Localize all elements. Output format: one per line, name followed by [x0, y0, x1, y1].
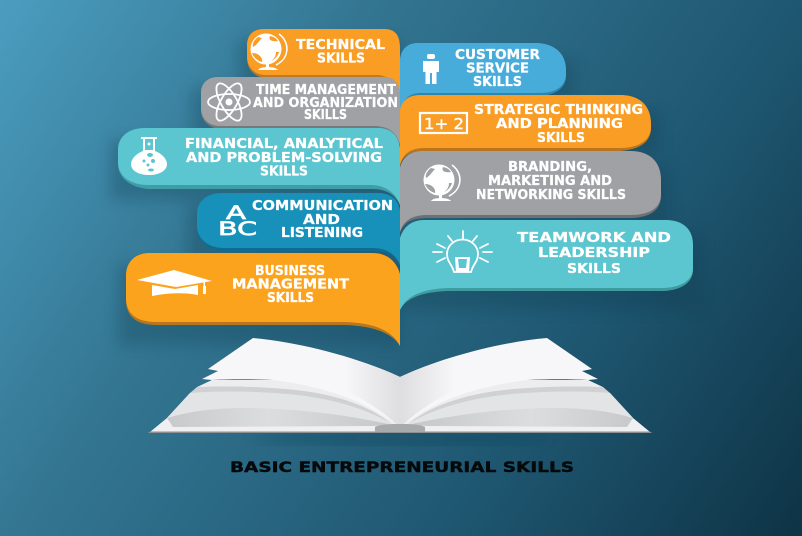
label: technical skills: SKILLS — [317, 52, 365, 66]
label: teamwork and leadership skills: TEAMWORK AND — [517, 231, 671, 246]
book base edge — [148, 432, 652, 433]
open book — [148, 338, 652, 443]
icon: ABC letters: A — [226, 202, 246, 224]
label: communication and listening — [252, 199, 393, 241]
bubble: business management skills — [126, 253, 400, 346]
label: financial, analytical and problem-solving skills: SKILLS — [260, 164, 308, 180]
icon: globe — [250, 34, 287, 70]
bubble: branding, marketing and networking skills — [400, 151, 661, 232]
soft shadows behind speech bubbles — [110, 40, 702, 345]
label: branding, marketing and networking skills: NETWORKING SKILLS — [476, 188, 626, 203]
left pages — [150, 338, 400, 432]
label: time management and organization skills: SKILLS — [304, 108, 347, 123]
label: business management skills: BUSINESS — [255, 264, 325, 279]
icon: flask — [131, 137, 167, 175]
icon: globe — [424, 164, 460, 201]
icon: atom — [208, 80, 250, 124]
bubble: communication and listening skills — [197, 193, 400, 265]
label: customer service skills: SKILLS — [473, 75, 522, 90]
bubble: strategic thinking and planning skills — [400, 95, 651, 165]
label: strategic thinking and planning skills: AND PLANNING — [496, 117, 623, 132]
book shadow — [250, 433, 550, 443]
icon: light bulb — [433, 231, 492, 272]
label: customer service skills — [455, 48, 540, 90]
icon: graduation cap — [137, 270, 212, 296]
icon: 1+2 box: 1+ 2 — [424, 115, 464, 133]
title: BASIC ENTREPRENEURIAL SKILLS — [230, 460, 574, 476]
spine — [375, 424, 425, 432]
icon: 1+2 box — [420, 113, 467, 133]
label: business management skills: SKILLS — [267, 291, 314, 306]
label: time management and organization skills — [253, 83, 398, 123]
label: branding, marketing and networking skills: BRANDING, — [508, 160, 592, 175]
label: teamwork and leadership skills: SKILLS — [567, 262, 621, 277]
label: financial, analytical and problem-solving skills: FINANCIAL, ANALYTICAL — [185, 137, 383, 152]
label: branding, marketing and networking skills — [476, 160, 626, 203]
label: technical skills: TECHNICAL — [296, 38, 385, 53]
bubble: technical skills — [247, 29, 400, 100]
label: time management and organization skills: TIME MANAGEMENT — [256, 83, 396, 98]
icon: person — [423, 54, 439, 84]
label: technical skills — [296, 38, 385, 66]
label: financial, analytical and problem-solving skills: AND PROBLEM-SOLVING — [186, 151, 382, 166]
label: strategic thinking and planning skills — [474, 103, 643, 146]
label: strategic thinking and planning skills: SKILLS — [537, 131, 585, 146]
label: communication and listening: LISTENING — [281, 226, 363, 241]
bubble: time management and organization skills — [201, 77, 400, 145]
label: communication and listening: COMMUNICATION — [252, 199, 393, 214]
label: strategic thinking and planning skills: STRATEGIC THINKING — [474, 103, 643, 118]
label: financial, analytical and problem-solving skills — [185, 137, 383, 180]
label: business management skills: MANAGEMENT — [232, 278, 349, 292]
icon: ABC letters — [218, 202, 257, 240]
label: communication and listening: AND — [303, 213, 340, 228]
label: branding, marketing and networking skills: MARKETING AND — [488, 174, 612, 189]
bubble: customer service skills — [400, 43, 566, 110]
label: customer service skills: CUSTOMER — [455, 48, 540, 63]
icon: ABC letters: BC — [218, 218, 257, 240]
bubble: teamwork and leadership skills — [400, 220, 693, 310]
label: teamwork and leadership skills: LEADERSHIP — [538, 246, 650, 261]
label: business management skills — [232, 264, 349, 306]
right pages — [400, 338, 650, 432]
label: customer service skills: SERVICE — [466, 62, 529, 76]
label: time management and organization skills: AND ORGANIZATION — [253, 96, 398, 111]
bubble: financial, analytical and problem-solving skills — [118, 128, 400, 205]
label: teamwork and leadership skills — [517, 231, 671, 277]
